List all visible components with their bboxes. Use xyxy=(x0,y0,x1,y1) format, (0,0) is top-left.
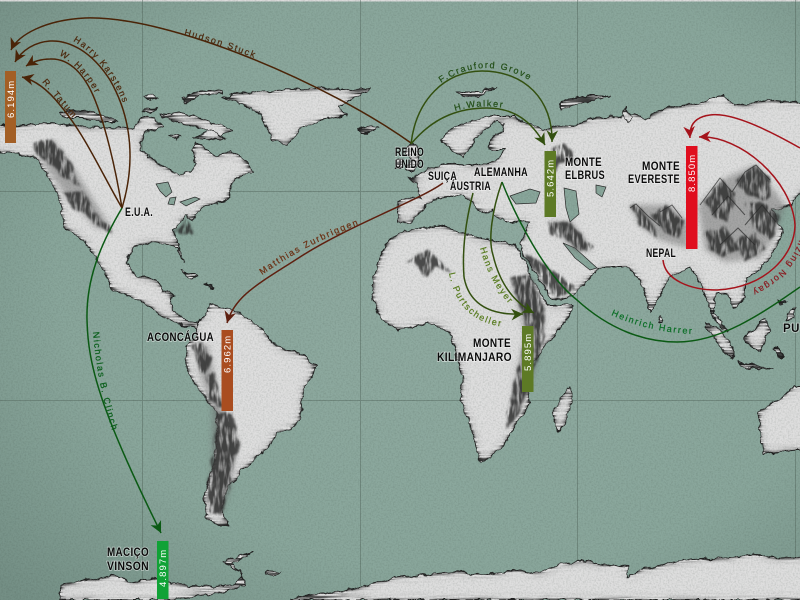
continent: Eurasia xyxy=(397,95,800,332)
continent: Antarctica west xyxy=(60,553,252,600)
mountain ranges shading xyxy=(33,140,780,515)
label: E.U.A.: E.U.A. xyxy=(125,207,153,219)
bar: Denali 6.194m: 6.194m xyxy=(6,80,17,118)
label: Harry Karstens: Harry Karstens xyxy=(74,36,127,102)
label: Monte Kilimanjaro: MONTE xyxy=(473,338,511,350)
route: arrival from the east xyxy=(690,115,800,148)
label: R. Tatum: R. Tatum xyxy=(42,78,76,118)
bar: Aconcagua 6.962m xyxy=(222,330,234,411)
label: Monte Kilimanjaro: KILIMANJARO xyxy=(437,352,512,364)
label: Monte Everest: EVERESTE xyxy=(628,174,680,186)
route: Harry Karstens xyxy=(15,41,130,208)
bar: Vinson 4.897m: 4.897m xyxy=(158,549,169,587)
bar: Everest 8.850m: 8.850m xyxy=(687,154,698,192)
label: Hudson Stuck: Hudson Stuck xyxy=(184,29,256,58)
route: R. Tatum xyxy=(22,77,122,208)
continent: Australia xyxy=(758,387,800,455)
bar: Denali 6.194m xyxy=(5,71,17,143)
label: Hans Meyer: Hans Meyer xyxy=(480,246,512,302)
bar: Elbrus 5.642m: 5.642m xyxy=(546,159,556,197)
label: Alemanha: ALEMANHA xyxy=(474,167,528,179)
route: Hudson Stuck xyxy=(11,18,411,143)
height bars xyxy=(5,71,698,599)
bar: Elbrus 5.642m xyxy=(544,151,556,217)
place labels xyxy=(107,147,800,573)
label: Suíça: SUIÇA xyxy=(428,171,457,183)
route: Tenzing Norgay xyxy=(663,137,795,290)
label: Nepal: NEPAL xyxy=(646,248,676,260)
continent: North America xyxy=(0,117,253,330)
islands xyxy=(60,88,796,576)
bar: Kilimanjaro 5.895m: 5.895m xyxy=(523,333,534,371)
label: W. Harper: W. Harper xyxy=(60,50,100,92)
route: Hans Meyer xyxy=(491,182,534,313)
label: Nicholas B. Clinch: Nicholas B. Clinch xyxy=(92,332,118,430)
label: Monte Everest: MONTE xyxy=(642,161,680,173)
bar: Vinson 4.897m xyxy=(157,541,169,599)
mountains: Atlas xyxy=(407,249,452,277)
route: W. Harper xyxy=(26,59,122,208)
route: Heinrich Harrer xyxy=(502,182,800,342)
route: Matthias Zurbriggen xyxy=(227,183,443,323)
route: L. Purtscheller xyxy=(463,193,523,314)
bar: Everest 8.850m xyxy=(686,146,698,249)
label: Matthias Zurbriggen: Matthias Zurbriggen xyxy=(259,220,358,275)
mountains: Himalaya peak outlines xyxy=(630,165,776,245)
route: H.Walker xyxy=(411,108,545,145)
mountain soft underlay xyxy=(36,142,785,515)
mountains: Caucasus and Iran xyxy=(520,143,593,298)
route: Nicholas B. Clinch xyxy=(87,208,161,533)
continent: Greenland xyxy=(222,87,370,145)
label: L. Purtscheller: L. Purtscheller xyxy=(449,272,502,326)
label: Heinrich Harrer: Heinrich Harrer xyxy=(612,310,692,334)
route labels xyxy=(42,29,800,430)
mountains: Rockies xyxy=(33,140,194,236)
label: Maciço Vinson: VINSON xyxy=(107,561,149,573)
bar: Kilimanjaro 5.895m xyxy=(522,326,534,392)
label: Reino Unido: REINO xyxy=(395,147,424,159)
label: Maciço Vinson: MACIÇO xyxy=(107,547,149,559)
bar: Aconcagua 6.962m: 6.962m xyxy=(222,335,234,373)
mountains: East Africa xyxy=(505,275,545,430)
label: Áustria: ÁUSTRIA xyxy=(450,180,491,193)
label: Monte Elbrus: ELBRUS xyxy=(565,170,605,182)
continent: Antarctica east xyxy=(290,555,800,600)
label: Monte Elbrus: MONTE xyxy=(565,157,602,169)
mountains: Himalaya and China peaks xyxy=(630,165,780,262)
label: H.Walker: H.Walker xyxy=(454,100,503,111)
mountains: Andes xyxy=(192,342,240,515)
label: Puncak Jaya clipped: PU xyxy=(783,323,800,335)
continent: Africa xyxy=(372,225,573,462)
label: F.Crauford Grove: F.Crauford Grove xyxy=(438,62,530,83)
label: Aconcágua: ACONCÁGUA xyxy=(147,331,214,344)
route: F.Crauford Grove xyxy=(411,71,552,144)
label: Reino Unido: UNIDO xyxy=(395,159,424,171)
inland waters xyxy=(156,182,606,270)
continent: South America xyxy=(185,304,317,527)
